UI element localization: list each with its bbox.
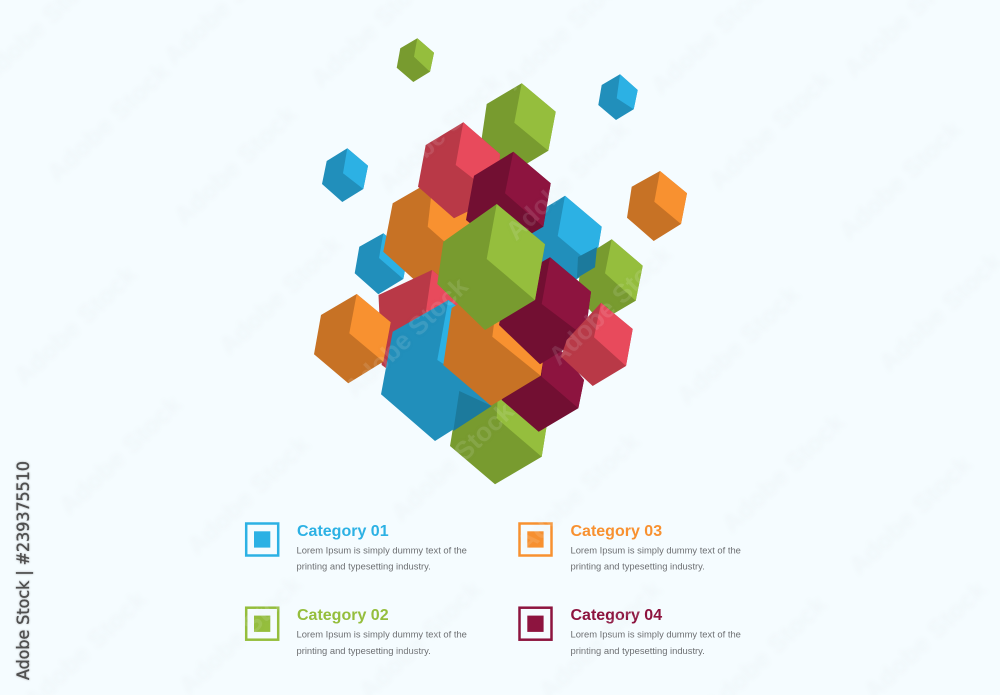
watermark pattern: Adobe Stock bbox=[510, 426, 646, 558]
cube: green right bbox=[577, 239, 643, 322]
cube: big green bbox=[437, 204, 545, 330]
cube: red right bbox=[561, 303, 633, 386]
heading: Category 04 bbox=[570, 607, 662, 624]
cube: red mid-left bbox=[378, 270, 480, 400]
legend: category 03 bbox=[520, 523, 741, 572]
cube: red upper bbox=[418, 122, 500, 218]
icon: green square bbox=[246, 608, 278, 640]
overlap shade: blue over green bbox=[577, 247, 597, 278]
description: Lorem Ipsum is simply dummy text of the bbox=[570, 544, 741, 556]
heading: Category 01 bbox=[297, 523, 389, 540]
icon: orange square bbox=[520, 524, 552, 556]
description: Lorem Ipsum is simply dummy text of the bbox=[296, 628, 467, 640]
cube: maroon middle bbox=[499, 257, 591, 364]
vertical stock credit: Adobe Stock | #239375510 bbox=[14, 461, 34, 680]
watermark pattern: Adobe Stock bbox=[384, 396, 520, 528]
description: printing and typesetting industry. bbox=[296, 645, 431, 656]
description: printing and typesetting industry. bbox=[570, 560, 705, 572]
watermark pattern: Adobe Stock bbox=[180, 429, 316, 561]
legend: category 02 bbox=[246, 607, 467, 656]
icon: blue square bbox=[246, 524, 278, 556]
watermark pattern: Adobe Stock bbox=[542, 239, 678, 371]
cube: maroon lower bbox=[502, 330, 584, 432]
watermark pattern: Adobe Stock bbox=[212, 229, 348, 361]
cube: maroon upper bbox=[466, 152, 551, 250]
cube: small green top bbox=[397, 38, 434, 82]
cube: orange upper-left bbox=[383, 180, 478, 291]
cube: blue upper-right bbox=[525, 196, 602, 290]
watermark pattern: Adobe Stock bbox=[52, 389, 188, 521]
watermark pattern: Adobe Stock bbox=[702, 64, 838, 196]
cube: green bottom bbox=[450, 370, 550, 484]
watermark pattern: Adobe Stock bbox=[40, 56, 176, 188]
description: Lorem Ipsum is simply dummy text of the bbox=[570, 628, 741, 640]
watermark pattern: Adobe Stock bbox=[167, 99, 303, 231]
cube: small blue right bbox=[598, 74, 638, 120]
cube: orange right bbox=[627, 171, 687, 241]
watermark pattern: Adobe Stock bbox=[7, 259, 143, 391]
watermark pattern: Adobe Stock bbox=[715, 407, 851, 539]
overlap shade: blue over green bottom bbox=[453, 391, 492, 431]
heading: Category 02 bbox=[297, 607, 389, 624]
cube: small blue left bbox=[322, 148, 368, 202]
watermark pattern: Adobe Stock bbox=[499, 114, 635, 246]
legend: category 01 bbox=[246, 523, 467, 572]
cube: big blue bbox=[381, 300, 510, 441]
watermark pattern: Adobe Stock bbox=[842, 449, 978, 581]
description: printing and typesetting industry. bbox=[570, 645, 705, 656]
legend: category 04 bbox=[520, 607, 741, 656]
watermark pattern: Adobe Stock bbox=[832, 114, 968, 246]
description: Lorem Ipsum is simply dummy text of the bbox=[296, 544, 467, 556]
heading: Category 03 bbox=[570, 523, 662, 540]
watermark pattern: Adobe Stock bbox=[372, 67, 508, 199]
watermark pattern: Adobe Stock bbox=[670, 279, 806, 411]
description: printing and typesetting industry. bbox=[296, 560, 431, 572]
cube: orange left bbox=[314, 294, 391, 383]
watermark pattern: Adobe Stock bbox=[338, 271, 474, 403]
cube: green upper bbox=[481, 83, 556, 172]
cube cluster bbox=[314, 38, 687, 484]
icon: maroon square bbox=[520, 608, 552, 640]
cube: orange centre bbox=[443, 278, 548, 406]
cube: blue mid-left bbox=[355, 233, 408, 294]
